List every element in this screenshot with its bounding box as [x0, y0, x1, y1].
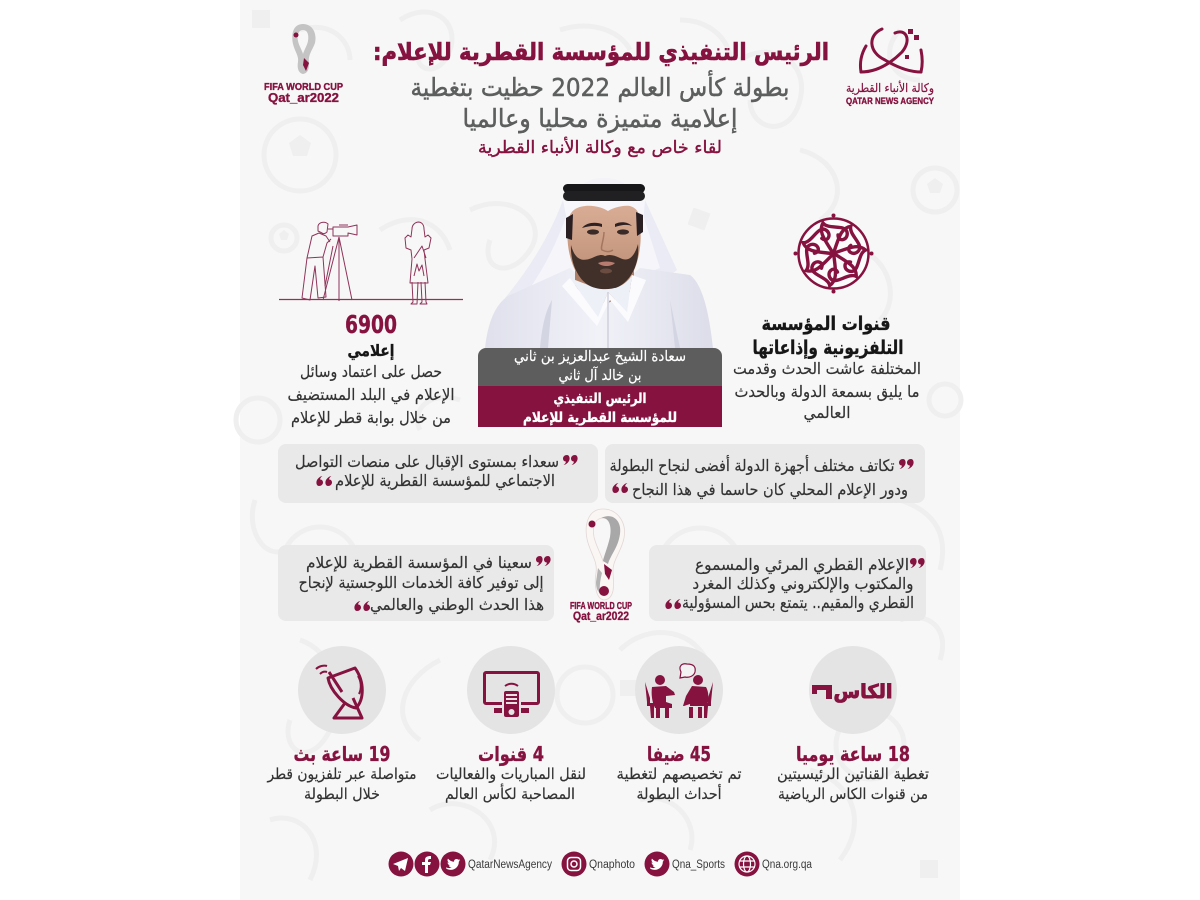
left stat: 6900 journalists: 6900	[345, 310, 397, 339]
caption: name and title: الرئيس التنفيذي	[554, 391, 646, 408]
facial features	[582, 222, 632, 228]
stat column: 45 guests: أحداث البطولة	[636, 784, 722, 803]
logo: FIFA World Cup centre: FIFA WORLD CUP	[570, 601, 632, 612]
icon: twitter sports	[644, 852, 670, 876]
collar	[562, 275, 646, 326]
icon: Al Kass logo: الكاس	[834, 681, 892, 703]
quote box: bottom left: سعينا في المؤسسة القطرية للإعلام	[306, 553, 532, 573]
thobe	[485, 268, 713, 348]
title block: الرئيس التنفيذي للمؤسسة القطرية للإعلام:	[373, 38, 829, 66]
quote box: bottom right: الإعلام القطري المرئي والمسموع	[695, 555, 909, 575]
logo: Qatar News Agency: وكالة الأنباء القطرية	[846, 80, 934, 96]
caption: name and title: بن خالد آل ثاني	[558, 366, 642, 384]
title block: إعلامية متميزة محليا وعالميا	[462, 104, 738, 134]
right text: TV channels	[733, 313, 921, 423]
footer: social links: QatarNewsAgency	[468, 859, 552, 871]
quote box: bottom left	[278, 545, 554, 621]
stat column: 45 guests: 45 ضيفا	[647, 742, 711, 766]
stat column: 45 guests: تم تخصيصهم لتغطية	[616, 765, 742, 783]
icon: Al Kass logo	[809, 646, 897, 734]
stat column: 19 hours: 19 ساعة بث	[294, 742, 390, 766]
icon: TV and remote	[467, 646, 555, 734]
quote box: bottom left: هذا الحدث الوطني والعالمي	[370, 595, 544, 615]
quote box: top left: سعداء بمستوى الإقبال على منصات التواصل	[295, 452, 559, 472]
quote box: top left	[278, 444, 598, 503]
caption: name and title: للمؤسسة القطرية للإعلام	[523, 410, 677, 426]
illustration: camera crew	[279, 222, 463, 304]
stat column: 45 guests	[616, 646, 742, 803]
left stat: 6900 journalists: الإعلام في البلد المستضيف	[288, 385, 454, 405]
quote box: top right: تكاتف مختلف أجهزة الدولة أفضى لنجاح البطولة	[610, 455, 894, 476]
left stat: 6900 journalists: من خلال بوابة قطر للإعلام	[291, 408, 451, 428]
quote box: bottom left: إلى توفير كافة الخدمات اللوجستية لإنجاح	[298, 573, 544, 593]
title block: بطولة كأس العالم 2022 حظيت بتغطية	[411, 69, 790, 103]
right text: TV channels: المختلفة عاشت الحدث وقدمت	[733, 359, 921, 379]
stat column: 18 hours daily: 18 ساعة يوميا	[796, 742, 910, 766]
icon: instagram	[562, 852, 586, 876]
quote box: bottom right: القطري والمقيم.. يتمتع بحس المسؤولية	[682, 593, 914, 613]
stat column: 19 hours: خلال البطولة	[304, 785, 380, 803]
logo: FIFA World Cup top: Qat_ar2022	[268, 90, 339, 105]
face	[567, 206, 641, 288]
quote box: top left: الاجتماعي للمؤسسة القطرية للإعلام	[335, 471, 555, 491]
logo: Qatar News Agency: QATAR NEWS AGENCY	[846, 96, 935, 107]
right text: TV channels: العالمي	[804, 403, 850, 423]
quote box: top right: ودور الإعلام المحلي كان حاسما في هذا النجاح	[632, 480, 908, 500]
stat column: 19 hours	[267, 646, 416, 803]
stat column: 4 channels: 4 قنوات	[478, 742, 544, 766]
agal	[563, 184, 645, 193]
icon: telegram	[388, 852, 414, 876]
logo: FIFA World Cup top: FIFA WORLD CUP	[264, 82, 343, 93]
caption: name and title: سعادة الشيخ عبدالعزيز بن ثاني	[514, 349, 686, 365]
icon: satellite dish	[298, 646, 386, 734]
left stat: 6900 journalists	[288, 310, 454, 428]
stat column: 4 channels: لنقل المباريات والفعاليات	[436, 765, 586, 783]
logo: FIFA World Cup top	[264, 24, 343, 105]
caption: name and title	[478, 348, 722, 427]
icon: rosette emblem	[794, 214, 874, 294]
logo: Qatar News Agency	[846, 29, 935, 107]
title block: لقاء خاص مع وكالة الأنباء القطرية	[478, 137, 722, 158]
logo: FIFA World Cup centre	[570, 509, 632, 623]
quote box: bottom right: والمكتوب والإلكتروني وكذلك المغرد	[692, 574, 914, 594]
page background panel	[236, 0, 961, 900]
footer: social links: Qnaphoto	[589, 859, 635, 871]
headcloth under the agal	[563, 200, 645, 226]
right text: TV channels: التلفزيونية وإذاعاتها	[752, 337, 904, 359]
icon: two people talking	[635, 646, 723, 734]
stat column: 18 hours daily: من قنوات الكاس الرياضية	[778, 785, 928, 803]
stat column: 4 channels: المصاحبة لكأس العالم	[445, 783, 575, 803]
stat column: 18 hours daily	[777, 646, 929, 803]
left stat: 6900 journalists: إعلامي	[348, 341, 394, 361]
left stat: 6900 journalists: حصل على اعتماد وسائل	[300, 362, 442, 382]
logo: FIFA World Cup centre: Qat_ar2022	[573, 609, 629, 623]
stat column: 4 channels	[436, 646, 586, 803]
footer: social links	[388, 852, 813, 876]
stat column: 19 hours: متواصلة عبر تلفزيون قطر	[267, 765, 416, 783]
right text: TV channels: قنوات المؤسسة	[762, 313, 890, 335]
beard	[571, 244, 638, 289]
footer: social links: Qna_Sports	[672, 859, 725, 871]
quote box: top right	[605, 444, 925, 503]
icon: twitter	[440, 852, 466, 876]
neck	[575, 262, 634, 304]
stat column: 18 hours daily: تغطية القناتين الرئيسيتين	[777, 765, 929, 783]
icon: globe	[734, 852, 760, 876]
title block	[373, 38, 829, 158]
footer: social links: Qna.org.qa	[762, 859, 813, 871]
portrait photo	[485, 178, 713, 348]
quote box: bottom right	[649, 545, 926, 621]
ghutra drape	[505, 200, 677, 320]
right text: TV channels: ما يليق بسمعة الدولة وبالحدث	[734, 382, 920, 402]
icon: facebook	[414, 852, 440, 876]
